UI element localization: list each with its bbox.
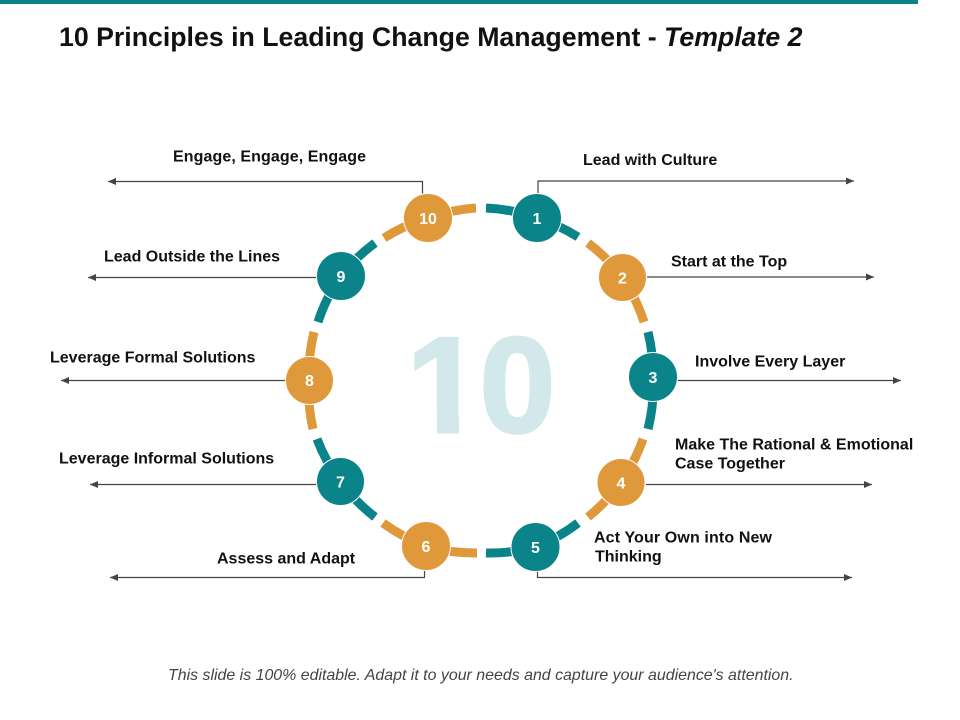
principle 10 xyxy=(108,148,452,242)
principle 5: Act Your Own into New xyxy=(594,530,773,546)
principle 8 xyxy=(50,350,334,404)
footer note: This slide is 100% editable. Adapt it to your needs and capture your audience's attention. xyxy=(168,667,794,684)
principle 1: 1 xyxy=(533,211,542,228)
principle 4: 4 xyxy=(617,476,626,492)
principle 4: Make The Rational & Emotional xyxy=(675,436,913,454)
dashed ring xyxy=(309,208,653,553)
principle 7: 7 xyxy=(336,474,345,492)
principle 2 xyxy=(598,254,874,302)
title: 10 Principles in Leading Change Management - Template 2 xyxy=(59,22,803,52)
principle 2: Start at the Top xyxy=(671,254,787,270)
principle 6: 6 xyxy=(422,539,431,556)
principle 3: Involve Every Layer xyxy=(695,354,845,370)
principle 1: Lead with Culture xyxy=(583,152,717,169)
principle 2: 2 xyxy=(618,270,627,288)
big center number: 1 xyxy=(406,309,482,461)
principle 3: 3 xyxy=(649,370,658,387)
principle 5 xyxy=(511,522,852,578)
principle 6: Assess and Adapt xyxy=(217,550,356,568)
principle 5: 5 xyxy=(531,540,540,557)
principle 10: Engage, Engage, Engage xyxy=(173,148,366,166)
principle 3 xyxy=(628,352,901,402)
principle 8: 8 xyxy=(305,373,314,390)
big center number xyxy=(414,336,552,435)
principle 9 xyxy=(88,248,366,300)
principle 1 xyxy=(512,152,854,242)
principle 8: Leverage Formal Solutions xyxy=(50,350,255,366)
principle 7 xyxy=(59,450,364,506)
principle 5: Thinking xyxy=(595,548,662,566)
top bar xyxy=(0,0,918,4)
principle 9: Lead Outside the Lines xyxy=(104,248,280,266)
principle 6 xyxy=(110,522,450,578)
principle 9: 9 xyxy=(337,269,346,286)
principle 4 xyxy=(597,436,913,506)
principle 4: Case Together xyxy=(675,456,785,472)
principle 7: Leverage Informal Solutions xyxy=(59,450,274,468)
principle 10: 10 xyxy=(419,211,437,228)
big center number: 0 xyxy=(480,309,555,461)
